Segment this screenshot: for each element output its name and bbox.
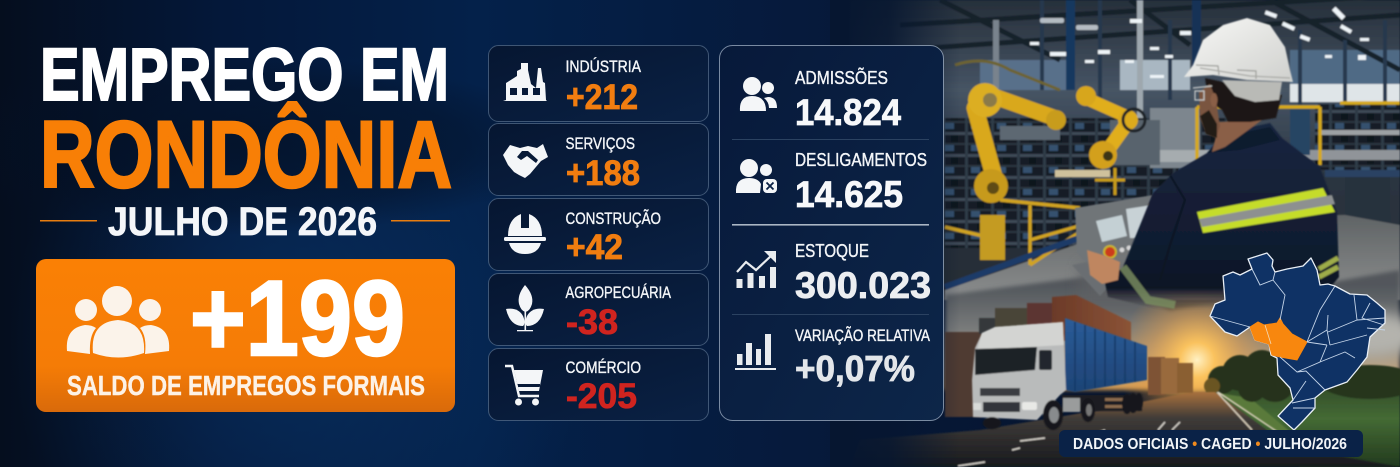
- machinery: [945, 118, 1235, 248]
- photo: sunset sky: [945, 265, 1400, 440]
- icon: plant: [506, 285, 544, 331]
- footer badge: DADOS OFICIAIS • CAGED • JULHO/2026: [1073, 436, 1347, 453]
- photo: grass and trees: [1204, 350, 1400, 467]
- map of Brazil with Rondônia and Mato Grosso highlighted: [1210, 253, 1385, 430]
- metric: admissões: ADMISSÕES: [795, 67, 888, 88]
- metric: estoque: ESTOQUE: [795, 241, 869, 261]
- photo: road: [850, 392, 1400, 467]
- icon: bar chart: [735, 334, 776, 370]
- card: construção: +42: [566, 228, 623, 267]
- metric: estoque: [736, 241, 931, 306]
- value: +199: +199: [190, 258, 405, 378]
- card: indústria: +212: [566, 78, 638, 117]
- card: serviços: [488, 124, 708, 196]
- card: indústria: INDÚSTRIA: [566, 57, 641, 76]
- metric: variação relativa: [735, 326, 931, 389]
- ceiling lights: [1030, 7, 1369, 78]
- card: comércio: [488, 348, 708, 420]
- metric: desligamentos: [736, 150, 927, 215]
- card: agropecuária: [488, 274, 708, 346]
- card: indústria: [488, 46, 708, 122]
- card: serviços: SERVIÇOS: [566, 135, 635, 153]
- yellow guard rails: [1197, 103, 1400, 165]
- panel: saldo de empregos: [36, 258, 455, 412]
- metric: desligamentos: DESLIGAMENTOS: [795, 150, 927, 170]
- icon: people with x: [736, 159, 777, 193]
- icon: handshake: [503, 144, 548, 178]
- metric: variação relativa: VARIAÇÃO RELATIVA: [795, 326, 931, 345]
- robot arm left: [975, 95, 1055, 180]
- card: comércio: -205: [566, 377, 637, 416]
- photo: worker: [1087, 18, 1339, 312]
- fade into background: [830, 0, 960, 467]
- card: construção: CONSTRUÇÃO: [566, 208, 661, 228]
- panel: indicators: [720, 46, 944, 420]
- floor: [945, 215, 1400, 300]
- title: RONDÔNIA: RONDÔNIA: [40, 102, 452, 208]
- label: saldo: SALDO DE EMPREGOS FORMAIS: [67, 370, 425, 401]
- icon: hard hat: [504, 214, 546, 254]
- card: serviços: +188: [566, 154, 640, 193]
- card: agropecuária: -38: [566, 303, 618, 342]
- card: comércio: COMÉRCIO: [566, 358, 641, 377]
- metric: desligamentos: 14.625: [795, 174, 903, 215]
- icon: people: [740, 77, 777, 111]
- robot arm right: [1083, 97, 1130, 150]
- icon: rising chart: [736, 251, 776, 288]
- title: EMPREGO EM: EMPREGO EM: [40, 33, 449, 116]
- photo: stacked containers: [945, 295, 1193, 417]
- icon: shopping cart: [505, 366, 543, 406]
- icon: factory: [503, 63, 547, 101]
- subtitle: JULHO DE 2026: JULHO DE 2026: [108, 200, 377, 244]
- metric: estoque: 300.023: [795, 265, 931, 306]
- photo: control panel: [1072, 195, 1153, 296]
- metric: variação relativa: +0,07%: [795, 348, 915, 389]
- metric: admissões: [740, 67, 901, 133]
- photo: truck: [972, 318, 1147, 430]
- photo: factory hall: [850, 0, 1400, 300]
- photo collage: factory, worker, truck and road: [830, 0, 1400, 467]
- footer badge: [1059, 430, 1363, 457]
- card: construção: [488, 198, 708, 270]
- metric: admissões: 14.824: [795, 92, 901, 133]
- icon: group of people: [67, 286, 169, 358]
- card: agropecuária: AGROPECUÁRIA: [566, 283, 671, 302]
